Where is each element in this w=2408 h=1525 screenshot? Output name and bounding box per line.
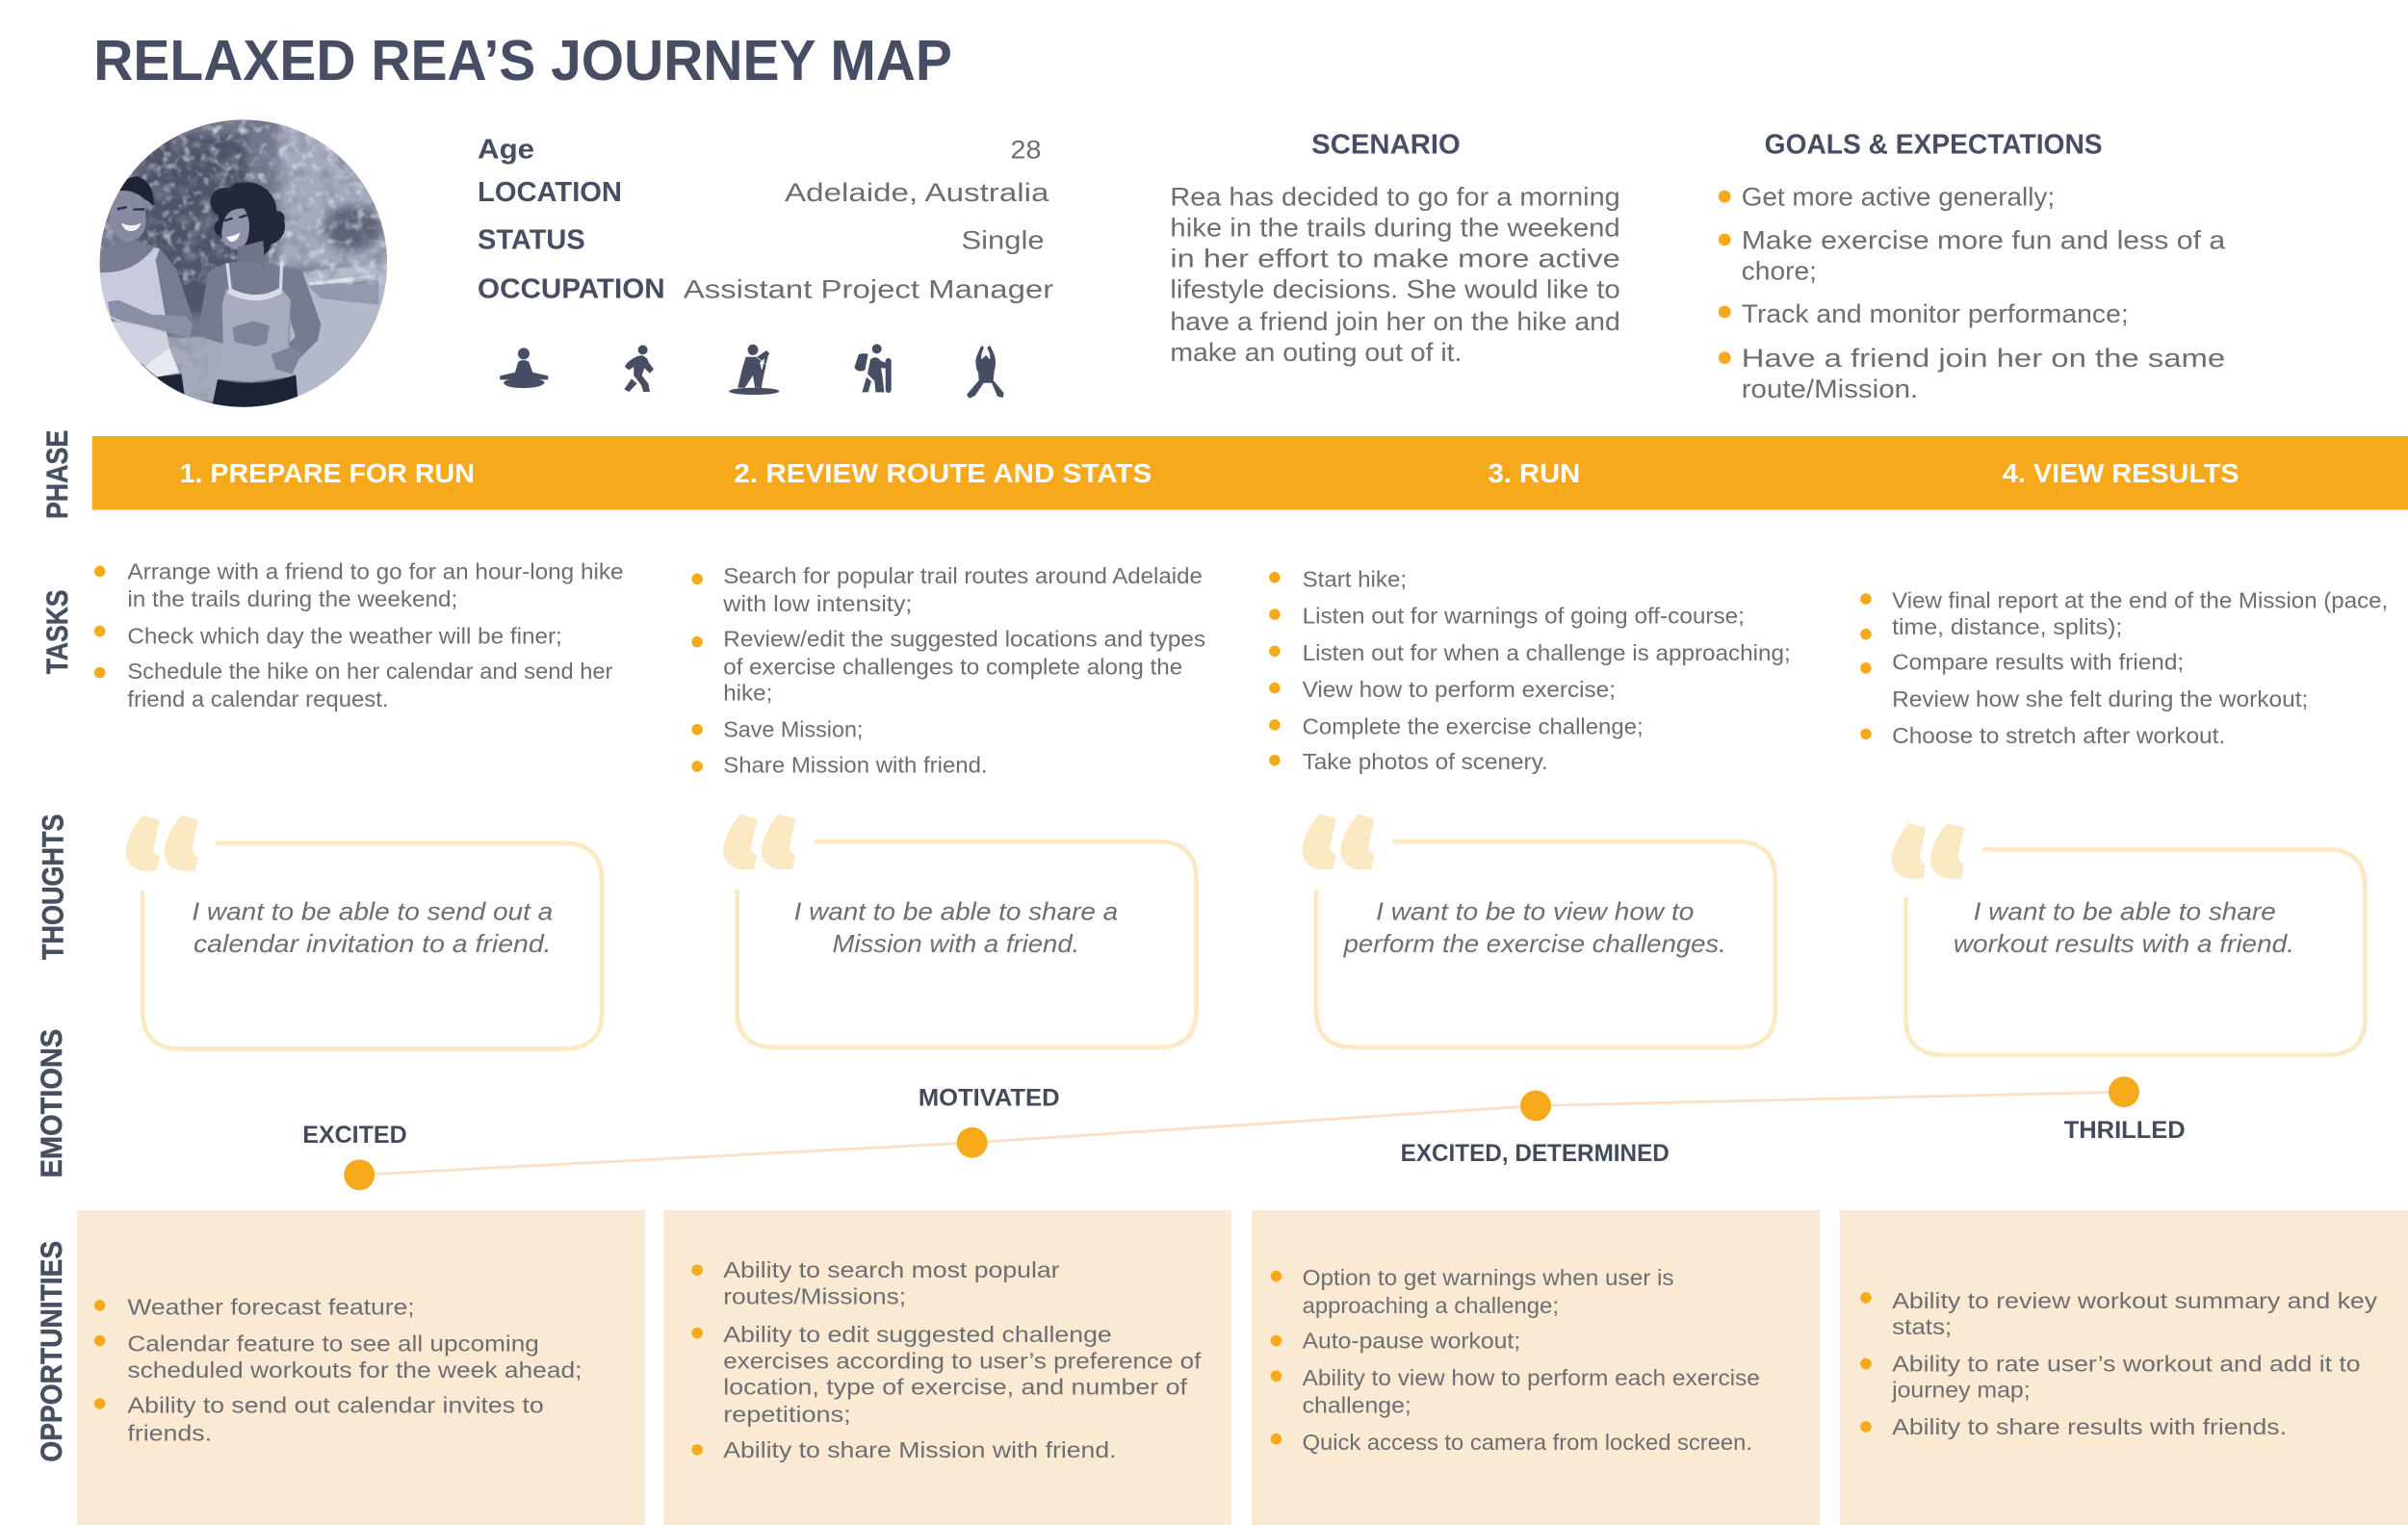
icon: meditation <box>500 348 548 388</box>
activity icons <box>500 344 1004 399</box>
panel: opportunities 4 <box>1840 1210 2408 1525</box>
panel: opportunities 4: Ability to rate user’s workout and add it to <box>1892 1351 2361 1376</box>
tasks: phase 2: hike; <box>723 680 772 705</box>
thought bubble 4: workout results with a friend. <box>1954 929 2294 958</box>
demographics: Single <box>961 225 1045 254</box>
tasks: phase 2: with low intensity; <box>722 591 912 616</box>
panel: opportunities 2: location, type of exercise, and number of <box>723 1374 1188 1399</box>
demographics: Assistant Project Manager <box>684 274 1053 303</box>
tasks: phase 2 <box>691 563 1205 777</box>
thought bubble 2: Mission with a friend. <box>833 929 1079 958</box>
tasks: phase 1: Check which day the weather will be finer; <box>127 623 562 648</box>
panel: opportunities 1: Ability to send out calendar invites to <box>127 1393 544 1418</box>
thought bubble 2 <box>723 814 1197 1047</box>
tasks: phase 3: Start hike; <box>1303 566 1407 591</box>
emotion curve: EXCITED <box>302 1122 407 1149</box>
thought bubble 1 <box>126 815 602 1048</box>
thought bubble 1: calendar invitation to a friend. <box>194 929 552 958</box>
tasks: phase 3: Take photos of scenery. <box>1303 749 1548 774</box>
demographics: OCCUPATION <box>478 273 665 304</box>
tasks: phase 3: View how to perform exercise; <box>1303 677 1616 702</box>
right woman <box>210 182 285 257</box>
row labels: OPPORTUNITIES <box>35 1241 68 1462</box>
emotion curve: MOTIVATED <box>919 1085 1060 1112</box>
scenario text: make an outing out of it. <box>1170 338 1462 367</box>
scenario text: hike in the trails during the weekend <box>1170 214 1620 243</box>
icon: stretching <box>967 346 1004 399</box>
goals list: route/Mission. <box>1742 375 1918 403</box>
goals list: Track and monitor performance; <box>1742 299 2129 328</box>
thought bubble 3 <box>1302 814 1775 1047</box>
title: RELAXED REA’S JOURNEY MAP <box>93 29 952 92</box>
persona photo <box>100 119 387 407</box>
tasks: phase 3: Listen out for when a challenge is approaching; <box>1303 640 1791 665</box>
panel: opportunities 1: Weather forecast feature; <box>127 1294 415 1319</box>
scenario text: have a friend join her on the hike and <box>1170 307 1620 336</box>
phase bar: 2. REVIEW ROUTE AND STATS <box>734 458 1152 488</box>
row labels: PHASE <box>40 430 74 519</box>
tasks: phase 2: Share Mission with friend. <box>723 752 988 777</box>
tasks: phase 3: Listen out for warnings of going off-course; <box>1303 604 1745 629</box>
tasks: phase 2: of exercise challenges to complete along the <box>723 654 1182 679</box>
icon: walking <box>624 345 654 392</box>
panel: opportunities 2: repetitions; <box>723 1402 851 1427</box>
tasks: phase 3 <box>1269 566 1791 774</box>
scenario text: Rea has decided to go for a morning <box>1170 183 1620 212</box>
row labels: TASKS <box>40 590 74 674</box>
panel: opportunities 3: Option to get warnings when user is <box>1303 1265 1674 1290</box>
demographics: Adelaide, Australia <box>785 178 1049 207</box>
demographics <box>478 134 1053 304</box>
left woman <box>116 176 154 205</box>
tasks: phase 1: Arrange with a friend to go for an hour-long hike <box>127 558 624 583</box>
phase bar <box>92 436 2408 510</box>
panel: opportunities 3: Auto-pause workout; <box>1303 1329 1520 1354</box>
tasks: phase 1: in the trails during the weekend; <box>127 586 457 611</box>
scenario text: lifestyle decisions. She would like to <box>1170 274 1620 303</box>
tasks: phase 2: Search for popular trail routes around Adelaide <box>723 563 1203 588</box>
demographics: STATUS <box>478 224 585 255</box>
demographics: 28 <box>1011 135 1041 164</box>
phase bar: 1. PREPARE FOR RUN <box>180 458 475 488</box>
demographics: LOCATION <box>478 177 622 208</box>
phase bar: 4. VIEW RESULTS <box>2003 458 2240 488</box>
goals list: Make exercise more fun and less of a <box>1742 225 2226 254</box>
goals list <box>1719 183 2226 403</box>
tasks: phase 4: Review how she felt during the workout; <box>1892 686 2308 711</box>
panel: opportunities 2: Ability to share Mission with friend. <box>723 1437 1117 1462</box>
panel: opportunities 2: Ability to edit suggested challenge <box>723 1322 1112 1347</box>
scenario text <box>1170 183 1620 367</box>
goals list: Get more active generally; <box>1742 183 2055 212</box>
thought bubble 3: perform the exercise challenges. <box>1343 929 1726 958</box>
thought bubble 4 <box>1892 823 2365 1055</box>
icon: hiker <box>854 344 889 392</box>
tasks: phase 1: Schedule the hike on her calendar and send her <box>127 659 613 684</box>
goals list: Have a friend join her on the same <box>1742 344 2225 373</box>
panel: opportunities 1: Calendar feature to see all upcoming <box>127 1331 539 1357</box>
emotion curve: THRILLED <box>2064 1117 2186 1144</box>
panel: opportunities 1 <box>77 1210 645 1525</box>
tasks: phase 4 <box>1860 588 2388 748</box>
panel: opportunities 4: Ability to share results with friends. <box>1892 1414 2287 1439</box>
panel: opportunities 3: Quick access to camera from locked screen. <box>1303 1430 1752 1455</box>
tasks: phase 4: Compare results with friend; <box>1892 649 2184 674</box>
tasks: phase 4: time, distance, splits); <box>1892 614 2122 639</box>
tasks: phase 2: Save Mission; <box>723 717 863 742</box>
goals list: chore; <box>1742 256 1817 285</box>
panel: opportunities 2: Ability to search most popular <box>723 1257 1060 1282</box>
thought bubble 4: I want to be able to share <box>1974 897 2276 926</box>
row labels: THOUGHTS <box>36 814 69 960</box>
tasks: phase 4: Choose to stretch after workout. <box>1892 723 2225 748</box>
tasks: phase 1 <box>94 558 624 711</box>
thought bubble 2: I want to be able to share a <box>794 897 1118 926</box>
panel: opportunities 3: challenge; <box>1303 1393 1411 1418</box>
thought bubble 1: I want to be able to send out a <box>192 897 553 926</box>
panel: opportunities 4: journey map; <box>1891 1378 2031 1403</box>
tasks: phase 1: friend a calendar request. <box>127 686 389 711</box>
demographics: Age <box>478 134 534 165</box>
goals heading: GOALS & EXPECTATIONS <box>1765 130 2103 161</box>
scenario heading: SCENARIO <box>1311 130 1461 161</box>
tasks: phase 3: Complete the exercise challenge; <box>1303 713 1644 738</box>
phase bar: 3. RUN <box>1489 458 1580 488</box>
panel: opportunities 1: friends. <box>127 1420 212 1445</box>
panel: opportunities 4: stats; <box>1892 1314 1952 1339</box>
tasks: phase 2: Review/edit the suggested locations and types <box>723 627 1205 652</box>
panel: opportunities 4: Ability to review workout summary and key <box>1892 1288 2378 1313</box>
tasks: phase 4: View final report at the end of the Mission (pace, <box>1892 588 2388 613</box>
row labels <box>35 430 74 1462</box>
row labels: EMOTIONS <box>35 1029 68 1177</box>
icon: paddle boarding <box>729 345 779 395</box>
emotion curve: EXCITED, DETERMINED <box>1401 1140 1670 1167</box>
emotion curve <box>302 1076 2186 1190</box>
panel: opportunities 3 <box>1252 1210 1820 1525</box>
panel: opportunities 2: exercises according to user’s preference of <box>723 1348 1202 1373</box>
panel: opportunities 1: scheduled workouts for the week ahead; <box>127 1357 583 1383</box>
thought bubble 3: I want to be to view how to <box>1376 897 1694 926</box>
scenario text: in her effort to make more active <box>1170 245 1620 273</box>
panel: opportunities 3: approaching a challenge; <box>1303 1293 1559 1318</box>
panel: opportunities 2 <box>663 1210 1231 1525</box>
panel: opportunities 3: Ability to view how to perform each exercise <box>1303 1365 1760 1390</box>
panel: opportunities 2: routes/Missions; <box>723 1283 906 1308</box>
